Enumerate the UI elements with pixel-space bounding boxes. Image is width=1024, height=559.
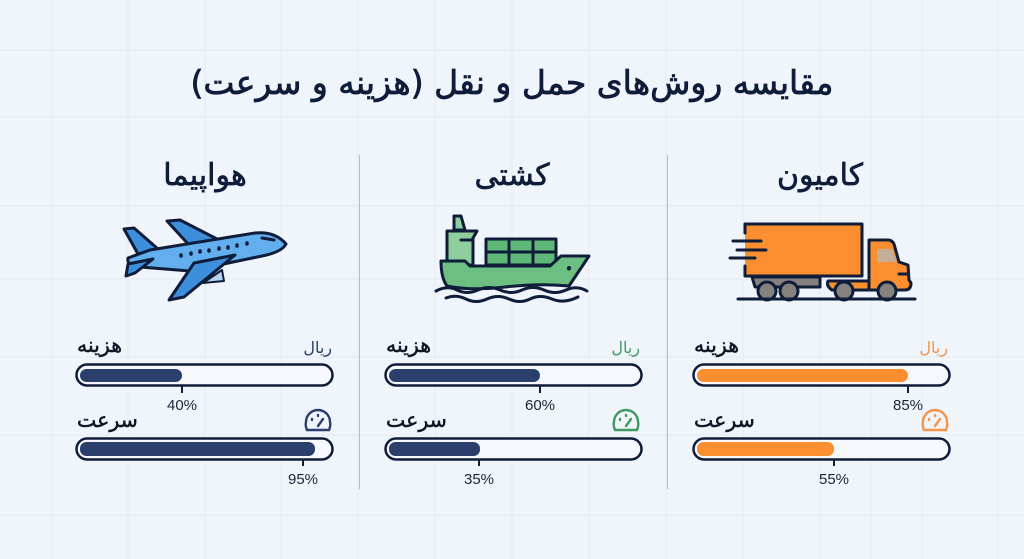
icon: gauge — [923, 410, 947, 430]
cost bar 60% — [386, 364, 642, 414]
icon: truck — [730, 224, 915, 300]
panel: airplane — [76, 158, 332, 488]
speed label: سرعت — [386, 408, 447, 432]
speed bar 35%: 35% — [464, 471, 494, 488]
cost label: هزینه — [77, 333, 122, 357]
cost label: هزینه — [386, 333, 431, 357]
currency label: ریال — [611, 338, 640, 358]
cost label: هزینه — [694, 333, 739, 357]
speed bar 35% — [386, 438, 642, 488]
heading: ship: کشتی — [474, 158, 550, 193]
cost bar 40%: 40% — [167, 397, 197, 414]
icon: gauge — [614, 410, 638, 430]
title: مقایسه روش‌های حمل و نقل (هزینه و سرعت) — [191, 63, 833, 102]
icon: airplane — [124, 220, 286, 300]
cost bar 85% — [694, 364, 950, 414]
speed bar 55%: 55% — [819, 471, 849, 488]
cost bar 85%: 85% — [893, 397, 923, 414]
divider — [360, 155, 668, 489]
heading: truck: کامیون — [777, 158, 864, 193]
speed bar 55% — [694, 438, 950, 488]
panel: truck — [694, 158, 950, 488]
icon: ship — [436, 216, 589, 302]
cost bar 60%: 60% — [525, 397, 555, 414]
cost bar 40% — [76, 364, 332, 414]
speed label: سرعت — [77, 408, 138, 432]
speed bar 95%: 95% — [288, 471, 318, 488]
icon: gauge — [306, 410, 330, 430]
heading: airplane: هواپیما — [163, 158, 247, 193]
panel: ship — [386, 158, 642, 488]
speed label: سرعت — [694, 408, 755, 432]
currency label: ریال — [919, 338, 948, 358]
currency label: ریال — [303, 338, 332, 358]
speed bar 95% — [76, 438, 332, 488]
